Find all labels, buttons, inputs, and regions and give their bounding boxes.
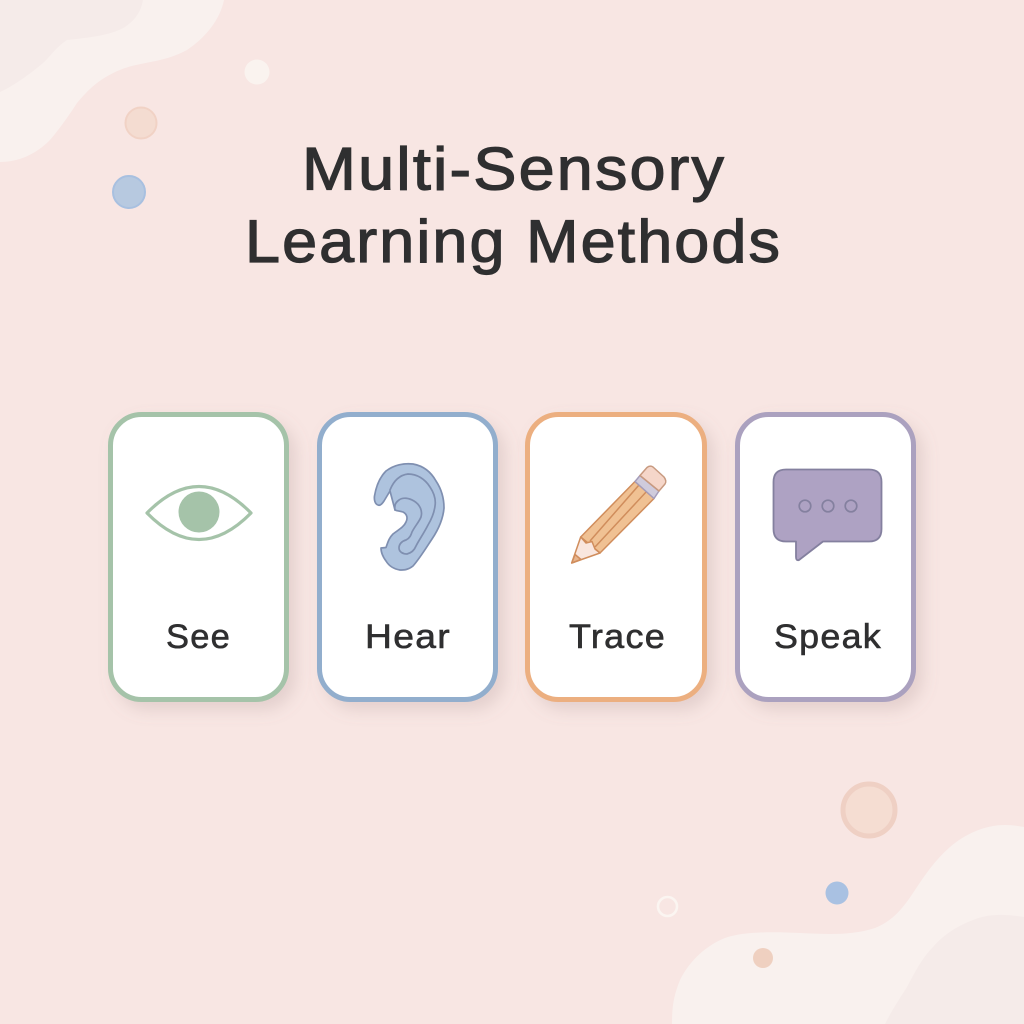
decorative dot: small blue — [826, 882, 848, 904]
decorative dot: white — [244, 60, 270, 84]
title: Multi-Sensory — [302, 136, 726, 202]
top-left decorative waves — [0, 0, 224, 162]
decorative dot: blue — [113, 176, 145, 208]
decorative ring: white — [658, 897, 677, 916]
label: See: See — [166, 618, 231, 656]
icon: eye — [147, 486, 251, 540]
icon: ear — [374, 464, 444, 570]
label: Hear: Hear — [365, 618, 451, 656]
bottom-right decorative waves — [672, 825, 1024, 1024]
decorative circle: large peach — [843, 784, 895, 836]
title — [245, 136, 782, 275]
decorative dot: small peach — [753, 948, 773, 968]
icon: pencil — [572, 466, 666, 563]
card: Speak — [738, 414, 914, 700]
card: See — [110, 414, 286, 700]
card: Trace — [528, 414, 704, 700]
title: Learning Methods — [245, 208, 782, 275]
icon: speech bubble — [774, 470, 882, 560]
label: Speak: Speak — [774, 618, 882, 656]
decorative dot: peach — [126, 108, 156, 138]
label: Trace: Trace — [569, 618, 666, 656]
card: Hear — [320, 414, 496, 700]
